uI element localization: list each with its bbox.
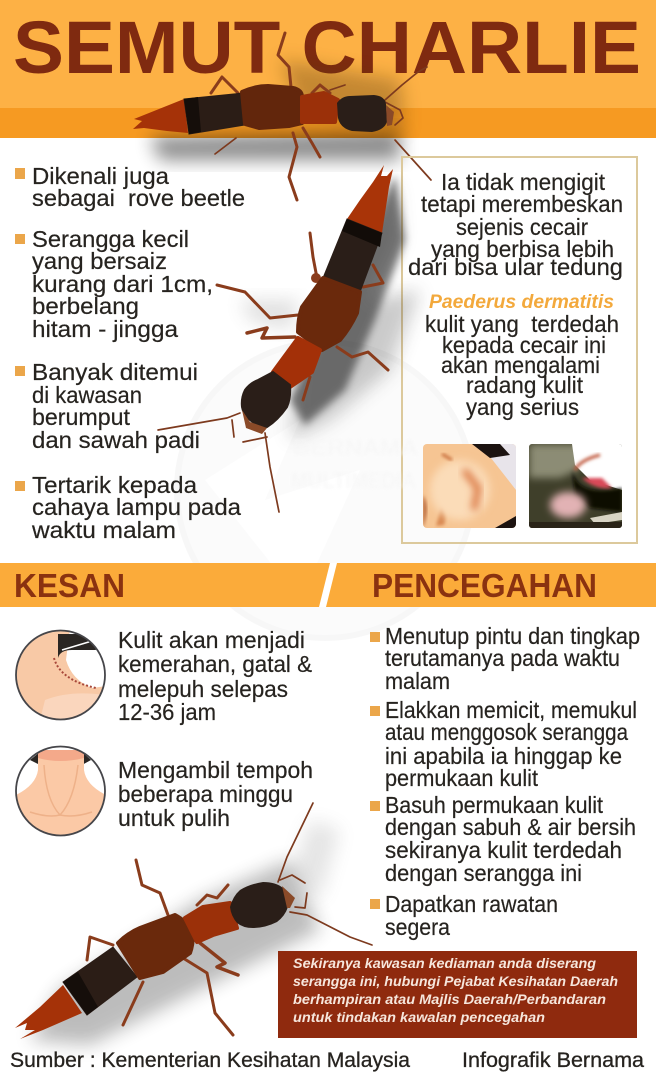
header band: [0, 0, 656, 138]
text block: description bullets: Serangga kecil: [32, 226, 189, 252]
text block: pencegahan list: malam: [385, 668, 450, 694]
text block: pencegahan list: Basuh permukaan kulit: [385, 792, 603, 818]
text block: description bullets: Tertarik kepada: [32, 472, 198, 498]
panel: venom information: Paederus dermatitis: [429, 292, 614, 313]
text block: pencegahan list: atau menggosok serangga: [385, 719, 629, 745]
text block: kesan 1: melepuh selepas: [118, 676, 288, 702]
text block: description bullets: yang bersaiz: [32, 248, 167, 274]
watermark text: [291, 435, 418, 493]
text block: kesan 1: [118, 627, 312, 725]
source credit: Sumber : Kementerian Kesihatan Malaysia: [10, 1049, 410, 1072]
panel: venom information: yang berbisa lebih: [431, 236, 614, 262]
callout: warning box: [278, 951, 637, 1038]
text block: pencegahan list: sekiranya kulit terdedah: [385, 837, 622, 863]
text block: description bullets: waktu malam: [31, 517, 176, 543]
text block: description bullets: dan sawah padi: [32, 427, 200, 453]
panel: venom information: kepada cecair ini: [442, 332, 606, 358]
text block: description bullets: kurang dari 1cm,: [32, 271, 213, 297]
section header: Pencegahan: PENCEGAHAN: [372, 567, 597, 604]
text block: kesan 2: untuk pulih: [118, 805, 230, 831]
watermark text: MULTIMEDIA: [291, 468, 416, 493]
text block: pencegahan list: dengan serangga ini: [385, 860, 582, 886]
publisher credit: Infografik Bernama: [462, 1049, 644, 1072]
panel: venom information: akan mengalami: [441, 352, 600, 378]
text block: kesan 2: Mengambil tempoh: [118, 757, 313, 783]
text block: description bullets: Banyak ditemui: [32, 359, 198, 385]
text block: kesan 2: [118, 757, 313, 831]
title: SEMUT CHARLIE: [13, 6, 641, 89]
text block: description bullets: hitam - jingga: [32, 316, 179, 342]
callout: warning box: untuk tindakan kawalan pencegahan: [293, 1009, 545, 1025]
panel: venom information: radang kulit: [466, 372, 583, 398]
panel: venom information: Ia tidak mengigit: [441, 169, 605, 195]
beetle: top horizontal: [133, 33, 431, 200]
text block: pencegahan list: [370, 623, 640, 940]
text block: kesan 1: 12-36 jam: [118, 699, 216, 725]
panel: venom information: tetapi merembeskan: [421, 191, 623, 217]
panel: venom information: yang serius: [466, 394, 579, 420]
callout: warning box: serangga ini, hubungi Pejabat Kesihatan Daerah: [293, 973, 618, 989]
text block: description bullets: cahaya lampu pada: [32, 494, 242, 520]
text block: kesan 1: kemerahan, gatal &: [118, 651, 312, 677]
panel: venom information: sejenis cecair: [456, 214, 588, 240]
text block: description bullets: sebagai rove beetle: [32, 185, 245, 211]
callout: warning box: Sekiranya kawasan kediaman anda diserang: [293, 955, 596, 971]
text block: pencegahan list: segera: [385, 914, 451, 940]
text block: description bullets: di kawasan: [32, 382, 142, 408]
callout: warning box: berhampiran atau Majlis Daerah/Perbandaran: [293, 991, 606, 1007]
section header: Kesan: KESAN: [14, 567, 125, 604]
text block: description bullets: Dikenali juga: [32, 163, 170, 189]
text block: description bullets: [15, 163, 245, 543]
icon: neck recovery: [16, 746, 106, 840]
beetle: diagonal centre: [158, 165, 420, 512]
text block: description bullets: berbelang: [32, 293, 139, 319]
text block: pencegahan list: Dapatkan rawatan: [385, 891, 558, 917]
panel: venom information: kulit yang terdedah: [425, 311, 619, 337]
watermark text: BERNAMA: [293, 435, 418, 460]
photo: skin lesion on face: [529, 444, 622, 528]
text block: kesan 2: beberapa minggu: [118, 781, 293, 807]
section header: Kesan: [0, 563, 656, 607]
text block: description bullets: berumput: [32, 404, 130, 430]
icon: skin rash on neck: [16, 628, 106, 720]
text block: pencegahan list: Menutup pintu dan tingkap: [385, 623, 640, 649]
beetle: bottom: [15, 803, 372, 1045]
panel: venom information: [402, 157, 637, 543]
text block: pencegahan list: permukaan kulit: [385, 765, 538, 791]
watermark: [177, 342, 473, 638]
text block: pencegahan list: dengan sabuh & air bersih: [385, 814, 636, 840]
text block: pencegahan list: ini apabila ia hinggap ke: [385, 743, 622, 769]
panel: venom information: dari bisa ular tedung: [408, 254, 623, 280]
text block: pencegahan list: terutamanya pada waktu: [385, 645, 620, 671]
photo: skin rash on shoulder: [423, 444, 516, 528]
text block: kesan 1: Kulit akan menjadi: [118, 627, 305, 653]
